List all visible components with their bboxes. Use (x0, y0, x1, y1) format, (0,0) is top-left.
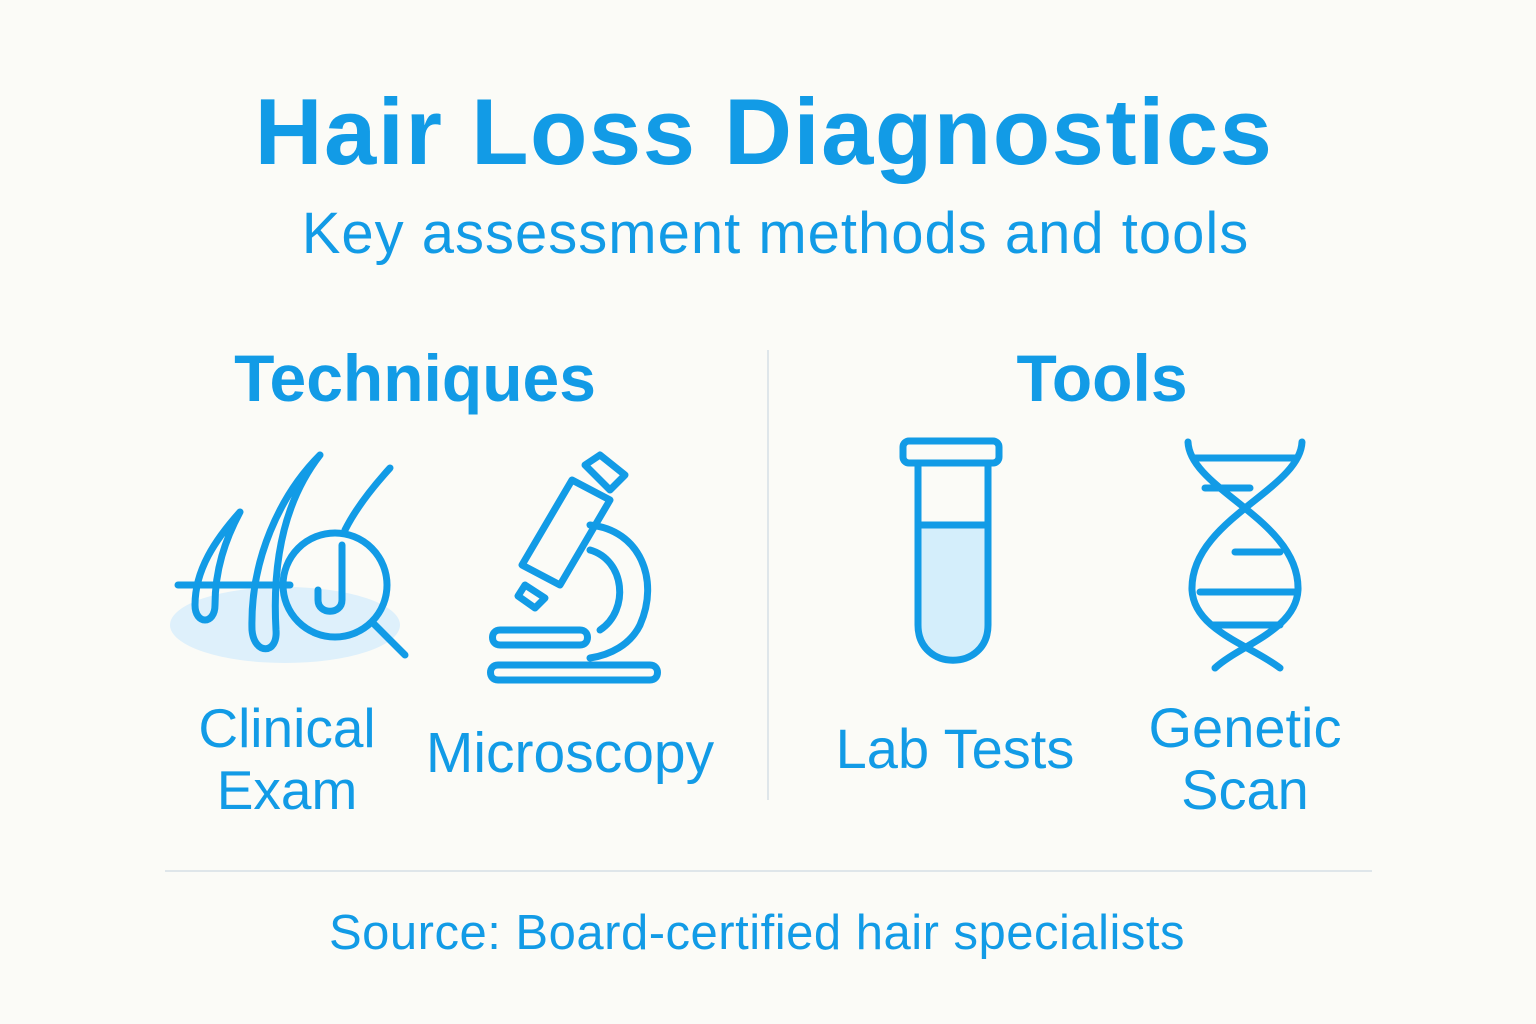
label: microscopy: Microscopy (426, 721, 714, 785)
divider horizontal (165, 870, 1372, 872)
divider vertical (767, 350, 769, 800)
title: Hair Loss Diagnostics (255, 79, 1273, 184)
label: genetic scan: Scan (1181, 758, 1309, 821)
icon: dna (1184, 438, 1306, 672)
icon: microscope (487, 451, 661, 684)
label: clinical exam (198, 697, 376, 821)
heading: tools: Tools (1016, 341, 1188, 415)
label: genetic scan (1148, 696, 1342, 821)
icon: clinical exam (170, 452, 408, 663)
label: clinical exam: Exam (217, 759, 357, 821)
label: lab tests: Lab Tests (836, 717, 1074, 780)
source note: Source: Board-certified hair specialists (329, 906, 1185, 960)
heading: techniques: Techniques (234, 341, 596, 415)
icon: test tube (900, 438, 1002, 664)
label: genetic scan: Genetic (1148, 696, 1342, 759)
label: clinical exam: Clinical (198, 697, 376, 759)
subtitle: Key assessment methods and tools (302, 201, 1249, 266)
